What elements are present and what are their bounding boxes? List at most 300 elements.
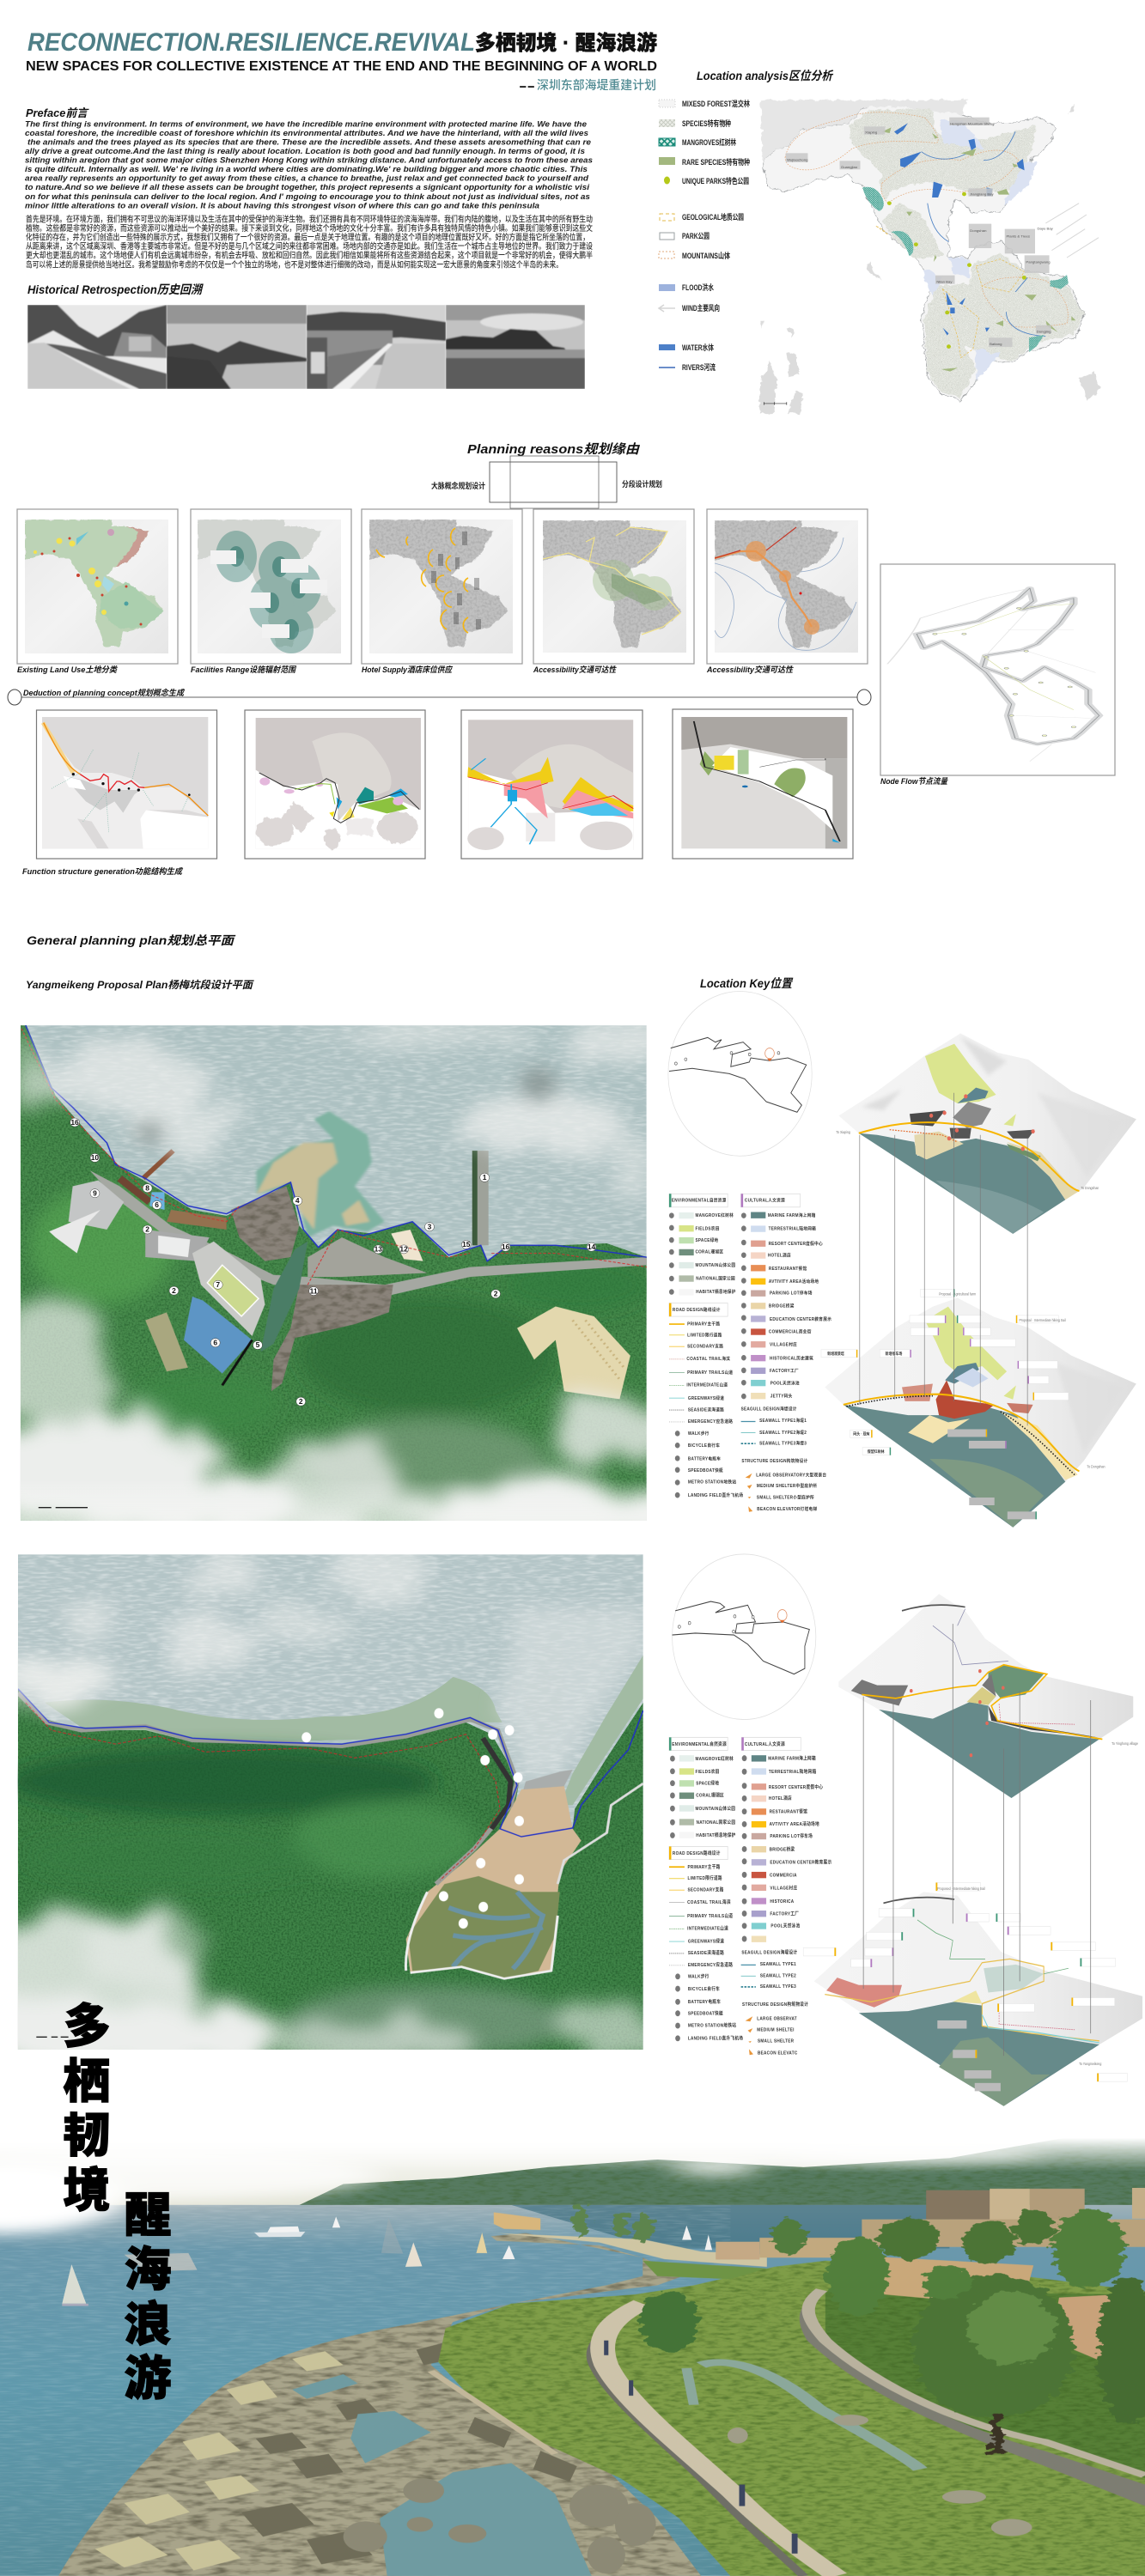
retaining wall and footpaths bbox=[592, 2316, 803, 2576]
map: location analysis: Guangjiao bbox=[841, 165, 858, 169]
legend: location analysis bbox=[659, 99, 750, 372]
swatches bbox=[679, 1212, 765, 1399]
legend text: VILLAGE村庄 bbox=[770, 1884, 797, 1891]
legend rows: GEOLOGICAL地质公园 bbox=[682, 212, 744, 222]
legend text: TERRESTRIAL陆地网箱 bbox=[769, 1767, 816, 1775]
line samples and icons bbox=[669, 1324, 755, 1443]
distant hills bbox=[300, 2129, 1145, 2208]
panel: existing land use bbox=[17, 509, 178, 664]
legend text: PARKING LOT停车场 bbox=[770, 1832, 813, 1839]
legend text: HABITAT栖息地保护 bbox=[696, 1832, 736, 1838]
legend text: BRIDGE桥梁 bbox=[769, 1303, 795, 1309]
legend text: PRIMARY TRAILS山道 bbox=[687, 1911, 734, 1919]
legend text: FIELDS农田 bbox=[695, 1767, 720, 1775]
sea bbox=[0, 2205, 1145, 2576]
legend text: HOTEL酒店 bbox=[769, 1795, 792, 1801]
photo 3 bbox=[307, 305, 446, 389]
legend text: STRUCTURE DESIGN构筑物设计 bbox=[742, 2001, 808, 2008]
sky bbox=[0, 2132, 1145, 2206]
legend text: POOL天然泳池 bbox=[770, 1922, 801, 1929]
text block: preface chinese: 首先是环境。在环境方面，我们拥有不可思议的海洋环境以及生活在其中的受保护的海洋生物。我们还拥有具有不同环境特征的滨海海岸带。我们有内陆的腹地，以及生活在其中的所有野生动 bbox=[26, 215, 593, 225]
legend text: BEACON ELEVATC bbox=[758, 2050, 797, 2057]
map image bbox=[25, 519, 168, 653]
map: location analysis: Pangtangwang bbox=[1026, 260, 1051, 264]
legend header boxes bbox=[669, 1737, 801, 1860]
panel: accessibility 2 bbox=[707, 509, 868, 664]
panel: accessibility 1 bbox=[533, 509, 694, 664]
buildings bbox=[716, 2188, 1145, 2365]
land outline bbox=[763, 101, 1085, 401]
legend text: ENVIRONMENTAL自然资源 bbox=[672, 1197, 727, 1204]
concept diagram bbox=[42, 717, 208, 848]
plan numbered markers: 14 bbox=[588, 1243, 596, 1251]
legend rows: UNIQUE PARKS特色公园 bbox=[682, 176, 749, 185]
scale bar bbox=[39, 1506, 88, 1509]
legend rows: PARK公园 bbox=[682, 232, 710, 240]
lawn by plaza bbox=[643, 2261, 767, 2279]
legend text: NATIONAL国家公园 bbox=[696, 1275, 735, 1282]
text block: preface english: to nature.And so we believe if all these assets can be brought together, this project represents a signicant opportunity for a wholistic visi bbox=[25, 183, 589, 192]
map: location analysis: Wujiaochong bbox=[787, 157, 808, 161]
legend text bbox=[672, 1740, 831, 2057]
text block: preface english: minor little alterations to an overall vision. It is about having this strongest vison of where this can go and take this peninsula bbox=[25, 201, 539, 211]
legend text: BATTERY电瓶车 bbox=[688, 1997, 721, 2005]
map: location analysis: Xiaping bbox=[865, 130, 878, 134]
pier and jetty bbox=[143, 1151, 173, 1178]
concept diagram bbox=[681, 717, 847, 848]
legend text: METRO STATION地铁站 bbox=[688, 1479, 736, 1485]
wind arrows bbox=[1045, 204, 1099, 258]
plan numbered markers: 5 bbox=[256, 1342, 260, 1349]
mountain dashed outlines bbox=[785, 112, 1068, 327]
upper layer bbox=[838, 1594, 1133, 1798]
legend text: HISTORICA bbox=[770, 1899, 794, 1905]
legend text: SEAWALL TYPE2海堤2 bbox=[759, 1429, 807, 1436]
map: location analysis: Nilan Bay bbox=[936, 279, 953, 283]
legend rows: WIND主要风向 bbox=[682, 303, 720, 313]
text block: preface english: the animals and the trees played as its species that are there. These are the incredible assets. And these assets aresomething that can re bbox=[27, 137, 592, 148]
map: location analysis: Dongshan bbox=[970, 228, 987, 233]
mangrove hatch bbox=[862, 187, 1069, 352]
legend rows: SPECIES特有物种 bbox=[682, 118, 731, 128]
legend text: BICYCLE自行车 bbox=[688, 1443, 720, 1449]
legend text: SEASIDE滨海道路 bbox=[688, 1949, 725, 1956]
legend text: FACTORY工厂 bbox=[770, 1911, 799, 1917]
vertical title: 醒海浪游 bbox=[124, 2189, 172, 2405]
location key circle 2 bbox=[673, 1554, 816, 1720]
legend text: AVTIVITY AREA活动场地 bbox=[769, 1279, 819, 1285]
panel: concept step 1 bbox=[36, 710, 216, 859]
building cluster bbox=[49, 1210, 100, 1254]
map: location analysis: Jiangjiang Bay bbox=[970, 191, 995, 196]
legend rows: FLOOD洪水 bbox=[682, 283, 714, 292]
pavilion bbox=[494, 2212, 540, 2230]
legend text: SEASIDE滨海道路 bbox=[688, 1406, 724, 1413]
text block: preface english bbox=[25, 120, 593, 211]
legend rows: WATER水体 bbox=[682, 343, 714, 352]
road band bbox=[18, 1692, 517, 1884]
lower layer: To Dongshan bbox=[1087, 1465, 1105, 1468]
legend text: EDUCATION CENTER教育展示 bbox=[770, 1316, 831, 1322]
plan numbered markers: 11 bbox=[310, 1288, 318, 1295]
panel: concept step 3 bbox=[461, 710, 643, 859]
axonometric diagram: second section bbox=[803, 1594, 1142, 2106]
legend text: NATIONAL国家公园 bbox=[697, 1818, 735, 1826]
flood areas bbox=[924, 120, 1037, 380]
vertical title: 醒海浪游: 游 bbox=[124, 2352, 172, 2405]
plan numbered markers: 3 bbox=[428, 1224, 432, 1230]
plan numbered markers: 2 bbox=[299, 1398, 303, 1406]
legend text: MOUNTAIN山体公园 bbox=[695, 1804, 735, 1812]
legend text: CULTURAL人文资源 bbox=[745, 1740, 785, 1747]
caption: Hotel Supply酒店床位供应 bbox=[362, 665, 453, 675]
lower layer: 码头 · 现有 bbox=[853, 1431, 870, 1437]
legend text: PRIMARY TRAILS山道 bbox=[687, 1370, 733, 1376]
legend text: SPACE绿地 bbox=[696, 1779, 720, 1787]
plan numbered markers bbox=[70, 1118, 596, 1406]
legend text: PRIMARY主干路 bbox=[687, 1321, 720, 1327]
plan numbered markers: 1 bbox=[483, 1174, 487, 1182]
legend text: VILLAGE村庄 bbox=[770, 1341, 797, 1347]
legend text: TERRESTRIAL陆地网箱 bbox=[769, 1225, 816, 1231]
legend text: HISTORICAL历史建筑 bbox=[770, 1355, 813, 1361]
caption: Accessibility交通可达性 bbox=[706, 665, 794, 675]
lower layer: 保留红树林 bbox=[868, 1449, 885, 1455]
legend text: RESORT CENTER度假中心 bbox=[769, 1783, 824, 1790]
legend text: MEDIUM SHELTER中型庇护所 bbox=[757, 1483, 817, 1489]
lower layer: Proposed · Intermediate hiking trail bbox=[937, 1886, 985, 1891]
text block: preface english: ally drive a great outcome.And the last thing is really about location. Location is both good and bad funnily enough. In terms of good, it is bbox=[25, 147, 585, 156]
lower layer: Proposal · Intermediate hiking trail bbox=[1019, 1319, 1066, 1322]
legend text: MEDIUM SHELTEI bbox=[757, 2027, 795, 2033]
legend text: SEAGULL DESIGN海堤设计 bbox=[741, 1948, 797, 1956]
site plan: second section bbox=[0, 1549, 662, 2077]
islands bbox=[759, 103, 1100, 414]
legend text: ENVIRONMENTAL自然资源 bbox=[672, 1740, 727, 1747]
legend rows: MANGROVES红树林 bbox=[682, 137, 736, 147]
legend text: SEAWALL TYPE3海堤3 bbox=[759, 1440, 807, 1447]
map image bbox=[715, 520, 858, 653]
plan numbered markers: 10 bbox=[91, 1154, 100, 1162]
upper layer bbox=[838, 1033, 1136, 1234]
legend text: SMALL SHELTER bbox=[758, 2038, 794, 2044]
plan numbered markers: 15 bbox=[462, 1241, 471, 1249]
swatches bbox=[679, 1755, 766, 1942]
legend text: PRIMARY主干路 bbox=[688, 1862, 721, 1870]
project name: -- bbox=[519, 79, 535, 94]
place labels bbox=[786, 118, 1051, 347]
legend text: EDUCATION CENTER教育展示 bbox=[770, 1858, 831, 1866]
legend text: WALK步行 bbox=[688, 1431, 710, 1437]
scale bar bbox=[764, 402, 787, 405]
photo 2 bbox=[167, 305, 307, 389]
lower layer: To Yinghong village bbox=[1112, 1741, 1139, 1746]
heading: historical retrospection: Historical Retrospection历史回溯 bbox=[27, 283, 204, 296]
panel: hotel supply bbox=[362, 509, 522, 664]
stream bbox=[701, 2362, 920, 2470]
lower layer: Proposal · Agricultural farm bbox=[939, 1292, 976, 1297]
legend text: ROAD DESIGN路线设计 bbox=[673, 1849, 721, 1856]
text block: preface english: is quite difcult. Internally as well. We' re living in a world where cities are dominating.We' re building bigger and more chaotic cities. This bbox=[25, 165, 588, 174]
blue roof bbox=[184, 1297, 253, 1374]
map image bbox=[198, 519, 341, 653]
vertical title: 多栖韧境 bbox=[63, 2000, 111, 2217]
legend text: RESTAURANT餐馆 bbox=[769, 1266, 807, 1272]
text block: preface english: The first thing is environment. In terms of environment, we have the incredible marine environment with protected marine life. We have the bbox=[25, 120, 588, 129]
plan numbered markers: 2 bbox=[494, 1291, 498, 1297]
diagram: overlap squares bbox=[431, 456, 662, 508]
hatched forest bbox=[849, 109, 1085, 398]
mist over sky bbox=[0, 2144, 1045, 2233]
legend text: MANGROVE红树林 bbox=[695, 1754, 734, 1762]
legend rows: RARE SPECIES特有物种 bbox=[682, 157, 750, 167]
sports field bbox=[207, 1265, 259, 1316]
site plan: yangmeikeng bbox=[0, 1017, 675, 1545]
legend rows: RIVERS河流 bbox=[682, 362, 716, 372]
plan numbered markers: 6 bbox=[155, 1202, 159, 1209]
scale bar bbox=[36, 2036, 69, 2038]
heading: planning reasons: Planning reasons规划缘由 bbox=[467, 442, 641, 457]
rock breakwater bbox=[58, 2233, 701, 2576]
legend rows bbox=[659, 99, 750, 372]
legend: first section bbox=[669, 1194, 831, 1512]
legend text: CULTURAL人文资源 bbox=[745, 1197, 785, 1204]
text block: preface chinese bbox=[26, 215, 593, 270]
panel: concept step 2 bbox=[245, 710, 425, 859]
legend text: SMALL SHELTER小型庇护所 bbox=[757, 1494, 814, 1500]
fallow ground bbox=[145, 1312, 188, 1371]
sand and wetland bbox=[406, 1785, 582, 1978]
legend text: SPACE绿地 bbox=[695, 1237, 719, 1243]
text block: preface chinese: 植物。这些都是非常好的资源，而这些资源可以推动出一个美好的结果。接下来谈到文化，同样地这个场地的文化十分丰富。我们有许多具有独特风情的特色小镇。如果我们能够意识到这些文 bbox=[26, 223, 593, 234]
heading: preface: Preface前言 bbox=[26, 106, 89, 119]
legend text: LARGE OBSERVAT bbox=[757, 2016, 797, 2022]
plan numbered markers: 16 bbox=[70, 1119, 79, 1127]
perspective rendering: shoreline bbox=[0, 2120, 1145, 2576]
plan numbered markers: 12 bbox=[399, 1246, 408, 1254]
legend header boxes bbox=[669, 1194, 801, 1316]
plaza and pier bbox=[496, 2233, 767, 2267]
panel: facilities range bbox=[191, 509, 351, 664]
vertical title: 多栖韧境: 境 bbox=[63, 2164, 111, 2217]
legend rows: MOUNTAINS山体 bbox=[682, 251, 730, 260]
forest land bbox=[21, 1025, 647, 1521]
legend text: MARINE FARM海上网箱 bbox=[768, 1754, 816, 1762]
legend text: JETTY码头 bbox=[770, 1393, 793, 1399]
lower layer: To Xiaping bbox=[836, 1131, 850, 1134]
canal bbox=[260, 1242, 308, 1352]
vertical title: 醒海浪游: 醒 bbox=[124, 2189, 172, 2242]
legend text: WALK步行 bbox=[688, 1972, 710, 1980]
map: location analysis: Dayu Bay bbox=[1037, 227, 1054, 231]
concept diagram bbox=[467, 720, 633, 850]
legend text: ROAD DESIGN路线设计 bbox=[673, 1307, 721, 1313]
legend text: FACTORY工厂 bbox=[770, 1369, 799, 1374]
legend text: BICYCLE自行车 bbox=[688, 1984, 720, 1992]
legend text: INTERMEDIATE山道 bbox=[686, 1382, 728, 1388]
boulders in pools bbox=[344, 2478, 656, 2573]
callout tags bbox=[821, 1289, 1069, 1455]
legend text: BEACON ELEVATOR灯塔电梯 bbox=[757, 1506, 817, 1512]
legend text: SPEEDBOAT快艇 bbox=[688, 2009, 723, 2017]
sea bbox=[21, 1025, 647, 1521]
map: location analysis: Baitang bbox=[990, 342, 1002, 346]
plan numbered markers: 4 bbox=[295, 1197, 300, 1205]
vertical title: 多栖韧境: 多 bbox=[63, 2000, 111, 2053]
location key circle 1 bbox=[668, 991, 812, 1156]
legend text: BRIDGE桥梁 bbox=[770, 1845, 795, 1853]
legend text: SPEEDBOAT快艇 bbox=[688, 1467, 723, 1473]
text block: preface english: coastal foreshore, the incredible coast of foreshore whichin its environmental attributes. And we have the hinterland, with all the wild lives bbox=[25, 129, 588, 138]
concept diagram bbox=[256, 718, 421, 848]
legend text: SECONDARY支路 bbox=[688, 1886, 724, 1893]
legend text: COASTAL TRAIL海滨 bbox=[686, 1356, 730, 1362]
line samples and icons bbox=[669, 1867, 756, 1987]
legend text: COMMERCIA bbox=[770, 1873, 797, 1879]
subtitle: NEW SPACES FOR COLLECTIVE EXISTENCE AT THE END AND THE BEGINNING OF A WORLD bbox=[26, 59, 657, 74]
text block: preface english: sitting within aregion that got some major cities Shenzhen Hong Kong within striking distance. And unfortunately access to from these areas bbox=[25, 156, 593, 165]
legend text: RESTAURANT餐馆 bbox=[770, 1807, 807, 1815]
projection lines bbox=[860, 1093, 1027, 1425]
road and town fabric bbox=[89, 1170, 647, 1297]
legend text: GREENWAYS绿道 bbox=[688, 1937, 725, 1945]
legend text: AVTIVITY AREA活动场地 bbox=[770, 1820, 819, 1827]
heading: yangmeikeng plan: Yangmeikeng Proposal Plan杨梅坑段设计平面 bbox=[26, 979, 254, 991]
legend text: GREENWAYS绿道 bbox=[688, 1394, 724, 1401]
map: location analysis bbox=[759, 100, 1100, 414]
trees bbox=[572, 2206, 1145, 2454]
text block: preface english: on for what this peninsula can deliver to the local region. And I' mgoing to encourage you to think about not just as individual sites, not as bbox=[25, 192, 590, 202]
map image bbox=[369, 519, 513, 653]
plan numbered markers: 9 bbox=[93, 1190, 97, 1197]
photo 4 bbox=[446, 305, 585, 389]
shallows bbox=[45, 1677, 502, 1742]
caption: Facilities Range设施辐射范围 bbox=[191, 665, 296, 675]
vertical title: 多栖韧境: 韧 bbox=[63, 2109, 111, 2162]
water bodies and rivers bbox=[894, 123, 1025, 336]
caption: Existing Land Use土地分类 bbox=[17, 665, 118, 675]
caption: Node Flow节点流量 bbox=[880, 776, 948, 787]
legend text: SEAGULL DESIGN海堤设计 bbox=[741, 1406, 797, 1413]
land and habitat layers bbox=[761, 100, 1085, 401]
grass slope bbox=[438, 2261, 1145, 2576]
text block: preface chinese: 岛可以将上述的愿景提供给当地社区。我希望鼓励你考虑的不仅仅是一个个独立的场地，也不是对整体进行细微的改动，而是从如何能实现这一宏大愿景的角度来引领这个半岛的未来。 bbox=[26, 259, 563, 270]
legend text: SECONDARY支路 bbox=[687, 1343, 723, 1350]
title: RECONNECTION.RESILIENCE.REVIVAL bbox=[27, 28, 475, 57]
panel: node flow bbox=[880, 564, 1115, 775]
callout tags bbox=[803, 1882, 1127, 2081]
photo 1 bbox=[27, 305, 167, 389]
text block: preface chinese: 更大却也更混乱的城市。这个场地使人们有机会远离城市纷杂，有机会去呼吸、放松和回归自然。因此我们相信如果能将所有这些资源结合起来，这个项目就是一个非常好的机会，使得大鹏半 bbox=[26, 251, 593, 261]
legend text: LANDING FIELD直升飞机场 bbox=[688, 1492, 743, 1498]
stones on the slope bbox=[728, 2415, 1032, 2537]
plan numbered markers: 7 bbox=[216, 1281, 221, 1289]
legend text: RESORT CENTER度假中心 bbox=[769, 1241, 823, 1247]
heading: deduction of planning concept bbox=[8, 688, 871, 705]
legend text: HOTEL酒店 bbox=[768, 1252, 791, 1258]
text block: preface chinese: 化特征的存在，并为它们创造出一些特殊的展示方式，我想我们又拥有了一个很好的资源。最后一点是关于地理位置。有趣的是这个项目的地理位置既好又坏。好的方面是指它所坐落的位置， bbox=[26, 232, 589, 242]
lower layer bbox=[821, 1131, 1136, 1528]
legend text: STRUCTURE DESIGN构筑物设计 bbox=[741, 1458, 808, 1464]
cyclists bbox=[604, 2341, 798, 2554]
lower layer: 新增停车场 bbox=[886, 1351, 903, 1357]
plan numbered markers: 6 bbox=[213, 1340, 218, 1346]
plan numbered markers: 16 bbox=[502, 1243, 510, 1251]
lower layer: To Dongshan bbox=[1081, 1187, 1099, 1190]
heading: location analysis: Location analysis区位分析 bbox=[697, 69, 834, 82]
panel: concept step 4 bbox=[673, 709, 853, 859]
vertical title: 醒海浪游: 海 bbox=[124, 2243, 172, 2296]
text block: preface chinese: 从距离来讲，这个区域离深圳、香港等主要城市非常近。但是不好的是与几个区域之间的来往都非常困难。场地内部的交通亦是如此。我们生活在一个城市占主导地位的世界。我们致力于建设 bbox=[26, 241, 593, 252]
vertical title: 醒海浪游: 浪 bbox=[124, 2298, 172, 2351]
heading: deduction of planning concept: Deduction of planning concept规划概念生成 bbox=[23, 688, 185, 698]
legend text: FIELDS农田 bbox=[695, 1225, 720, 1231]
geological dashed outlines bbox=[876, 226, 1025, 358]
legend text: SEAWALL TYPE2 bbox=[760, 1973, 796, 1979]
routes bbox=[18, 1689, 643, 1837]
project name: 深圳东部海堤重建计划 bbox=[537, 78, 656, 92]
map: location analysis: Hengshan Mountain Sheng bbox=[950, 121, 995, 125]
legend text: LIMITED限行道路 bbox=[688, 1874, 722, 1881]
white markers bbox=[301, 1708, 524, 1929]
clouds bbox=[0, 1549, 662, 2077]
tide pools bbox=[292, 2374, 592, 2576]
legend text: COASTAL TRAIL海滨 bbox=[687, 1899, 731, 1905]
legend text: METRO STATION地铁站 bbox=[688, 2021, 736, 2029]
top fade bbox=[0, 2120, 1145, 2172]
sea bbox=[18, 1554, 643, 2050]
node flow network bbox=[887, 588, 1099, 762]
map image bbox=[543, 520, 686, 653]
legend text: CORAL珊瑚区 bbox=[695, 1249, 723, 1255]
legend text: EMERGENCY应急道路 bbox=[688, 1419, 733, 1425]
plan numbered markers: 2 bbox=[172, 1287, 176, 1295]
legend text: SEAWALL TYPE3 bbox=[760, 1984, 796, 1990]
legend text: CORAL珊瑚区 bbox=[696, 1791, 724, 1799]
cleared sand slope bbox=[517, 1306, 630, 1399]
legend text: SEAWALL TYPE1 bbox=[760, 1961, 796, 1967]
legend rows: MIXESD FOREST混交林 bbox=[682, 99, 750, 108]
legend text: PARKING LOT停车场 bbox=[770, 1290, 813, 1297]
title: 多栖韧境 · 醒海浪游 bbox=[475, 31, 657, 55]
legend text: COMMERCIAL商业街 bbox=[769, 1328, 812, 1335]
rare species patches bbox=[882, 127, 1076, 372]
legend: second section bbox=[669, 1737, 831, 2057]
legend text: MOUNTAIN山体公园 bbox=[695, 1262, 735, 1268]
lower layer: 新增观景塔 bbox=[827, 1351, 845, 1357]
legend text: LANDING FIELD直升飞机场 bbox=[688, 2034, 743, 2042]
diagram: overlap squares: 分段设计规划 bbox=[622, 479, 662, 489]
sand bar and shallows bbox=[256, 1111, 385, 1237]
legend text: MARINE FARM海上网箱 bbox=[768, 1212, 816, 1218]
plan numbered markers: 8 bbox=[145, 1185, 149, 1192]
heading: location key: Location Key位置 bbox=[700, 976, 794, 990]
caption: Accessibility交通可达性 bbox=[533, 665, 617, 675]
clouds bbox=[0, 1017, 675, 1545]
heading: general planning plan: General planning plan规划总平面 bbox=[27, 933, 236, 947]
legend text: SEAWALL TYPE1海堤1 bbox=[759, 1418, 807, 1424]
plan numbered markers: 13 bbox=[375, 1246, 382, 1254]
lower layer bbox=[803, 1741, 1142, 2106]
unique parks dots bbox=[887, 192, 1026, 349]
legend text: INTERMEDIATE山道 bbox=[687, 1924, 728, 1932]
legend text: LARGE OBSERVATORY大型观景台 bbox=[756, 1472, 826, 1479]
red and blue routes bbox=[26, 1025, 647, 1261]
legend text: MANGROVE红树林 bbox=[695, 1212, 734, 1218]
axonometric diagram: first section bbox=[821, 1033, 1136, 1528]
legend text bbox=[672, 1197, 831, 1512]
legend text: EMERGENCY应急道路 bbox=[688, 1961, 734, 1968]
